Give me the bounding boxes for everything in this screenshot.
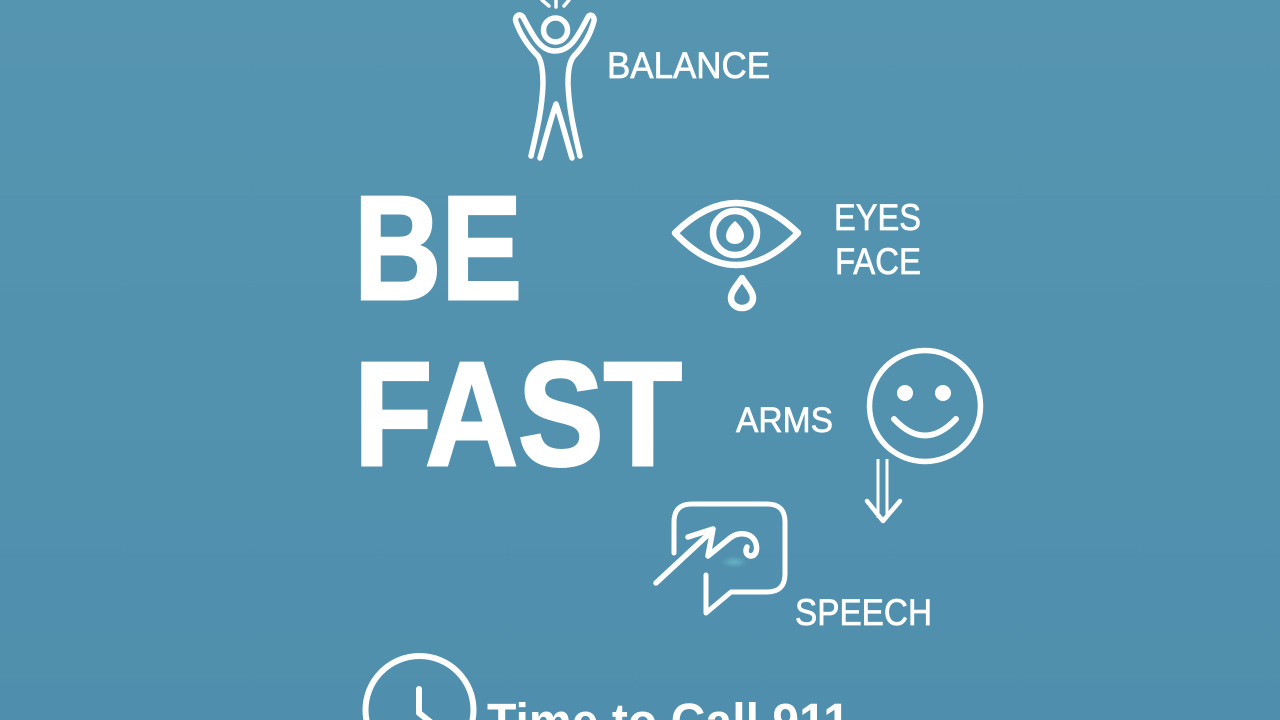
heading: BE: BE	[354, 166, 522, 331]
icon: speech bubble with arrow squiggle	[656, 504, 785, 613]
heading: FAST: FAST	[354, 332, 682, 497]
icon: eye with tear	[675, 203, 798, 308]
label: speech: SPEECH	[795, 592, 932, 633]
label: arms: ARMS	[736, 401, 833, 440]
label: face: FACE	[835, 241, 921, 282]
label: balance: BALANCE	[607, 45, 770, 86]
icon: clock	[366, 656, 474, 720]
label: eyes: EYES	[834, 197, 921, 238]
icon: balance figure	[516, 0, 594, 158]
arrow: down	[867, 459, 900, 521]
icon: smiley face	[870, 350, 980, 462]
